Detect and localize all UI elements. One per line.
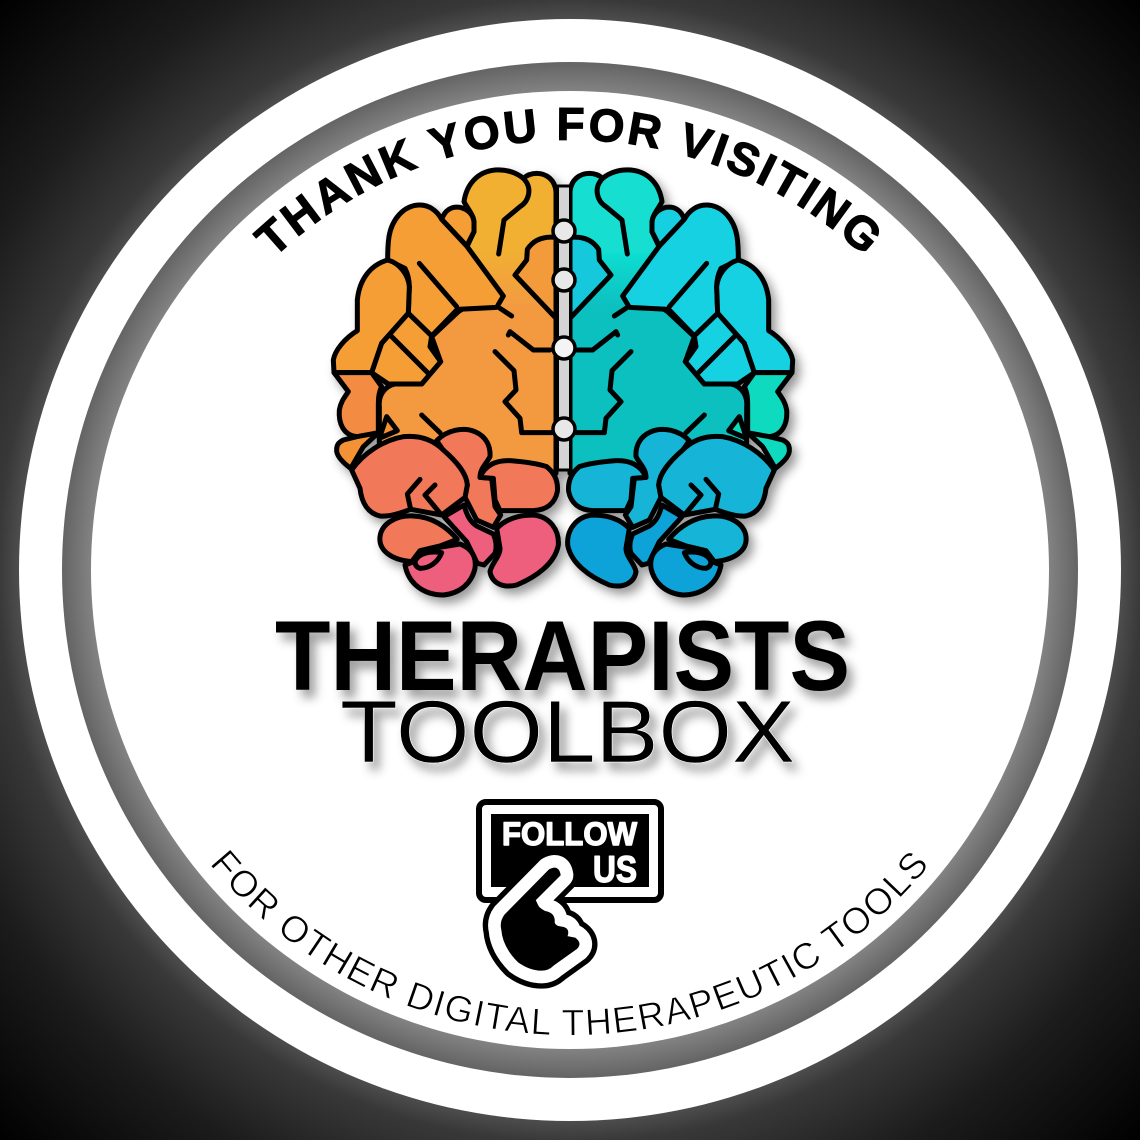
button face bbox=[491, 814, 649, 887]
curved caption: for other digital therapeutic tools: FOR OTHER DIGITAL THERAPEUTIC TOOLS bbox=[212, 850, 926, 1035]
button frame bbox=[479, 802, 661, 900]
inner white disc bbox=[91, 91, 1049, 1049]
brain logo bbox=[333, 170, 793, 595]
therapists: THERAPISTS bbox=[275, 600, 850, 711]
left hemisphere bbox=[333, 170, 558, 595]
us label: US bbox=[593, 849, 637, 890]
follow label: FOLLOW bbox=[502, 816, 638, 852]
central spine with nodes bbox=[553, 186, 575, 470]
pointing hand bbox=[501, 868, 579, 970]
curved heading: thank you for visiting: THANK YOU FOR VISITING bbox=[252, 108, 880, 252]
right hemisphere bbox=[568, 170, 793, 595]
toolbox: TOOLBOX bbox=[340, 682, 795, 781]
wordmark: therapists toolbox bbox=[275, 600, 850, 781]
grey ring bbox=[62, 62, 1078, 1078]
follow us button icon bbox=[479, 802, 661, 970]
